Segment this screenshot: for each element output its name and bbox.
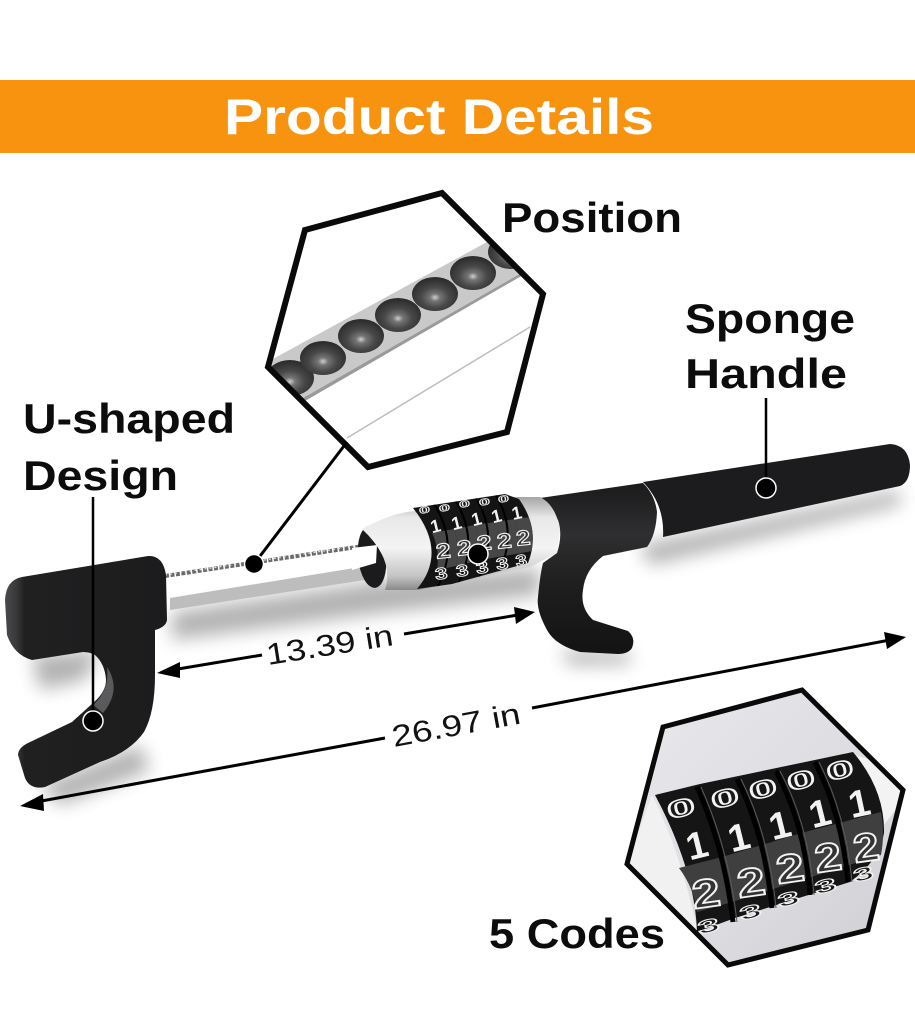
code wheels: 1: [510, 502, 524, 524]
code wheels: 2: [476, 531, 493, 556]
label: U-shaped Design: Design: [23, 452, 178, 499]
marker: code wheels: [468, 544, 488, 564]
callout: 5 code wheels detail: 3: [696, 914, 722, 939]
code wheels: 1: [489, 505, 504, 527]
sponge handle: [643, 444, 910, 537]
callout: 5 code wheels detail: 1: [682, 823, 712, 869]
right hook and grip: [538, 483, 657, 654]
product shadow: [32, 490, 900, 805]
callout: 5 code wheels detail: 0: [785, 764, 818, 797]
callout: 5 code wheels detail: 3: [851, 862, 876, 887]
code wheels: 2: [435, 539, 452, 564]
steering wheel lock product: [5, 444, 910, 788]
dimension: 26.97 in: [20, 632, 906, 811]
code wheels: 3: [455, 561, 470, 581]
code wheels: 0: [458, 498, 471, 510]
code wheels: 0: [497, 493, 510, 505]
callout: 5 code wheels detail: 1: [845, 782, 874, 827]
callout: 5 code wheels detail: 0: [747, 773, 780, 806]
code wheels: 0: [418, 504, 431, 516]
callout: position detail: [260, 193, 543, 467]
hook inner highlight: [93, 667, 114, 713]
code wheels: 2: [515, 525, 531, 550]
dimension: 13.39 in: 13.39 in: [264, 619, 396, 672]
code wheels: [413, 494, 533, 589]
callout: 5 code wheels detail: 3: [738, 900, 764, 925]
callout: 5 code wheels detail: 1: [724, 815, 754, 861]
label: Sponge Handle: [685, 295, 855, 397]
label: Position: Position: [502, 194, 682, 241]
callout: 5 code wheels detail: 2: [812, 834, 844, 882]
callout: 5 code wheels detail: 0: [824, 755, 856, 787]
callout: 5 code wheels detail: 2: [850, 824, 882, 872]
leader line: position: [244, 442, 347, 574]
code wheels: 3: [434, 564, 449, 584]
dimension: 13.39 in: [157, 607, 535, 678]
callout: 5 code wheels detail: 2: [734, 858, 768, 907]
code wheels: 2: [456, 536, 473, 561]
label: Sponge Handle: Sponge: [685, 295, 855, 342]
callout: 5 code wheels detail: 1: [765, 803, 795, 849]
label: 5 Codes: 5 Codes: [489, 910, 665, 957]
callout: 5 code wheels detail: [627, 690, 903, 965]
code wheels: 1: [449, 512, 464, 534]
title: Product Details: [224, 89, 654, 145]
code wheels: 1: [428, 515, 443, 537]
code wheels: 3: [495, 554, 510, 574]
callout: 5 code wheels detail: 3: [813, 874, 839, 899]
callout: 5 code wheels detail: 2: [689, 869, 723, 918]
combination barrel silver: [362, 497, 560, 590]
code wheels: 2: [496, 529, 513, 554]
callout: 5 code wheels detail: 0: [709, 782, 742, 815]
barrel end cap: [355, 525, 389, 589]
code wheels: 3: [475, 558, 490, 578]
banner: Product Details: [0, 80, 915, 153]
label: Sponge Handle: Handle: [685, 350, 847, 397]
dimension: 26.97 in: 26.97 in: [389, 698, 523, 754]
leader line: sponge handle: [756, 398, 776, 498]
rod end entering cap: [352, 545, 377, 570]
code wheels: 0: [478, 496, 491, 508]
code wheels: 0: [438, 502, 451, 514]
callout: 5 code wheels detail: 0: [665, 792, 698, 825]
leader line: U-shaped design: [83, 497, 103, 731]
callout: 5 code wheels detail: 3: [776, 887, 802, 912]
label: U-shaped Design: [23, 395, 235, 499]
rod and chain: [165, 544, 373, 610]
code wheels: 1: [469, 508, 484, 530]
label: U-shaped Design: U-shaped: [23, 395, 235, 442]
code wheels: 3: [514, 550, 528, 570]
left U-shaped hook: [5, 556, 167, 788]
callout: 5 code wheels detail: 2: [773, 844, 807, 893]
callout: 5 code wheels detail: 1: [805, 791, 835, 837]
